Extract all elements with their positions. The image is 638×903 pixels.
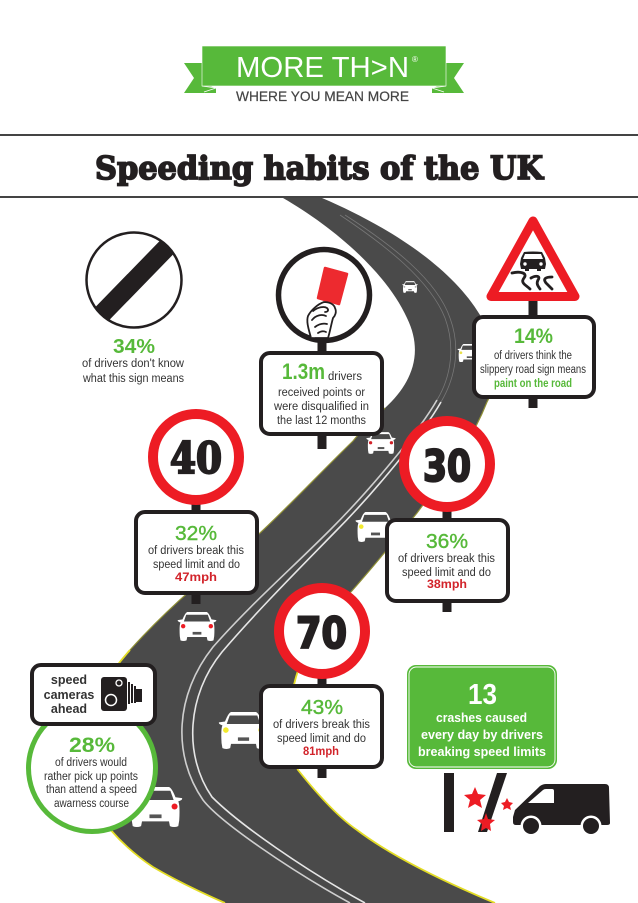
car: near 1.3m sign xyxy=(366,432,396,454)
panel: 28% circle: awarness course xyxy=(54,798,129,810)
sign: 70 limit: 70 xyxy=(296,609,347,659)
road xyxy=(80,198,496,903)
car: behind 43% sign xyxy=(219,712,268,749)
panel: 36%: 38mph xyxy=(427,577,467,591)
panel: 32% xyxy=(136,512,257,604)
stat: 34%: 34% xyxy=(113,336,155,358)
sign: speed cameras ahead: speed xyxy=(51,673,87,687)
panel: 32%: 47mph xyxy=(175,570,217,584)
sign: slippery road xyxy=(491,221,575,316)
sign: red card xyxy=(278,250,370,352)
panel: 28% circle: than attend a speed xyxy=(46,784,137,796)
panel: 43%: of drivers break this xyxy=(273,719,370,731)
panel: 14%: 14% xyxy=(514,325,553,348)
panel: 28% circle xyxy=(28,704,156,832)
panel: 43%: 43% xyxy=(301,697,343,719)
sign: national limit applies xyxy=(86,232,182,328)
title: Speeding habits of the UK xyxy=(95,149,544,187)
panel: 1.3m drivers: received points or xyxy=(278,387,365,399)
panel: 36% xyxy=(387,520,508,612)
sign: 30 limit: 30 xyxy=(423,442,471,492)
panel: 28% circle: rather pick up points xyxy=(44,771,138,783)
panel: 13 crashes: breaking speed limits xyxy=(418,745,546,759)
icon: broken sign post with stars xyxy=(444,773,513,832)
icon: van xyxy=(513,784,610,836)
car: behind 36% sign xyxy=(356,512,395,542)
panel: 43%: 81mph xyxy=(303,744,339,758)
stat: 34%: what this sign means xyxy=(82,373,184,385)
sign: 70 limit xyxy=(279,588,365,685)
panel: 13 crashes: every day by drivers xyxy=(421,728,543,742)
car: below 32% sign xyxy=(178,612,216,641)
panel: 14%: paint on the road xyxy=(494,378,572,390)
panel: 32%: speed limit and do xyxy=(153,559,240,571)
car: behind 14% sign xyxy=(458,344,482,362)
sign: speed cameras ahead: ahead xyxy=(51,702,87,716)
panel: 28% circle: of drivers would xyxy=(55,757,127,769)
panel: 1.3m drivers: drivers xyxy=(328,371,362,383)
panel: 32%: 32% xyxy=(175,523,217,545)
panel: 1.3m drivers: 1.3m xyxy=(282,359,325,384)
panel: 13 crashes: crashes caused xyxy=(436,711,527,725)
panel: 1.3m drivers: the last 12 months xyxy=(277,415,366,427)
panel: 28% circle: 28% xyxy=(69,734,115,757)
panel: 32%: of drivers break this xyxy=(148,545,244,557)
sign: 40 limit: 40 xyxy=(170,434,222,484)
stat: 34%: of drivers don't know xyxy=(82,358,185,370)
panel: 13 crashes: 13 xyxy=(468,679,497,711)
logo: MORE TH>N banner: MORE TH>N xyxy=(236,52,409,84)
sign: 30 limit xyxy=(404,421,490,519)
icon: hand holding card xyxy=(307,302,336,338)
panel: 36%: of drivers break this xyxy=(398,553,495,565)
panel: 1.3m drivers xyxy=(261,353,382,449)
icon: speed camera xyxy=(101,677,142,711)
panel: 13 crashes xyxy=(407,665,557,769)
panel: 43% xyxy=(261,686,382,778)
icon: skidding car xyxy=(512,252,552,289)
panel: 36%: speed limit and do xyxy=(402,567,491,579)
logo: MORE TH>N banner xyxy=(184,46,464,104)
panel: 14% xyxy=(474,317,594,408)
car: distant xyxy=(402,281,418,293)
panel: 14%: of drivers think the xyxy=(494,350,572,362)
logo: MORE TH>N banner: WHERE YOU MEAN MORE xyxy=(236,88,409,104)
panel: 43%: speed limit and do xyxy=(277,733,366,745)
sign: speed cameras ahead: cameras xyxy=(44,688,94,702)
logo: MORE TH>N banner: ® xyxy=(412,55,418,64)
panel: 1.3m drivers: were disqualified in xyxy=(273,401,369,413)
car: behind 28% circle xyxy=(129,787,182,827)
stat: 34% xyxy=(82,336,185,385)
sign: 40 limit xyxy=(153,414,239,512)
panel: 36%: 36% xyxy=(426,531,468,553)
sign: speed cameras ahead xyxy=(32,665,155,724)
panel: 14%: slippery road sign means xyxy=(480,364,586,376)
